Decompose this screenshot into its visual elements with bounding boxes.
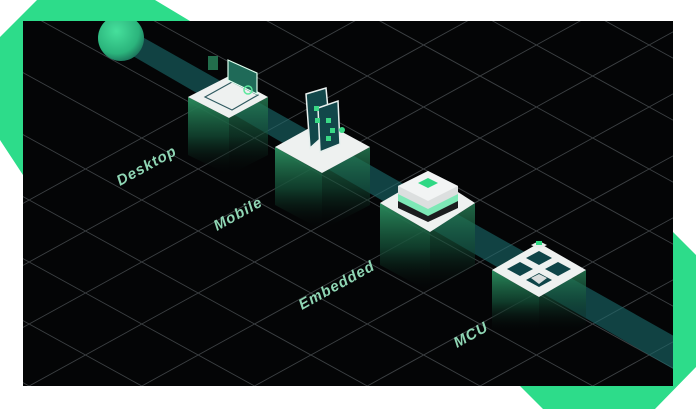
label: Embedded: Embedded (296, 258, 378, 313)
label: Desktop: Desktop (114, 143, 180, 189)
platform: MCU (492, 241, 586, 321)
beam (112, 30, 690, 370)
platform: Embedded (380, 171, 475, 292)
label: Mobile: Mobile (211, 194, 266, 234)
platform: Mobile (275, 88, 370, 230)
icon: chip (398, 171, 458, 222)
icon: phones (306, 88, 345, 152)
sphere (98, 21, 144, 61)
platform: Desktop (188, 56, 268, 175)
decoration: green corner top-left (0, 0, 190, 175)
icon: laptop (205, 56, 258, 110)
decoration: green corner bottom-right (520, 232, 696, 409)
icon: mcu tiles (507, 241, 571, 287)
label: MCU: MCU (451, 319, 492, 351)
